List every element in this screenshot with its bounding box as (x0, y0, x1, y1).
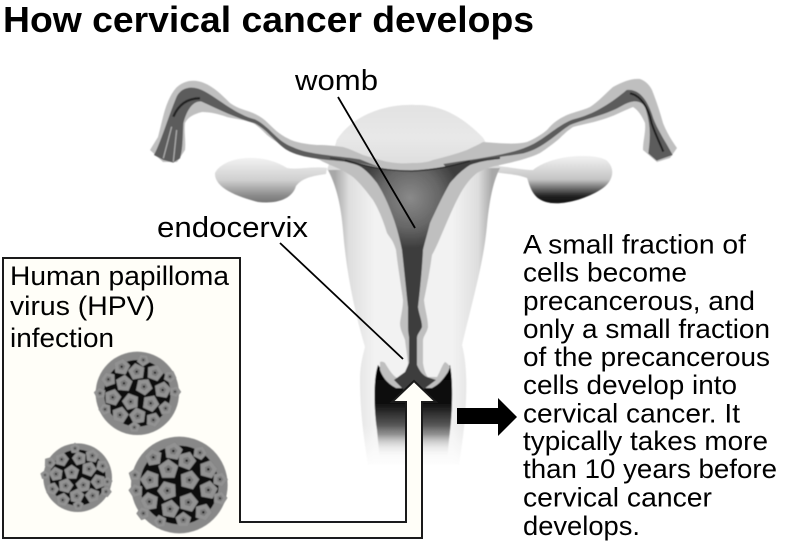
text block: explanation: cervical cancer (523, 482, 712, 512)
uterine wall and fallopian tubes outer band (150, 79, 677, 388)
text block: explanation: only a small fraction (523, 314, 770, 344)
text block: explanation: cells become (523, 258, 687, 288)
title: How cervical cancer develops (3, 0, 534, 40)
cavity roof line (345, 160, 470, 171)
left ovary (215, 158, 327, 202)
text block: explanation: A small fraction of (523, 230, 747, 260)
left tube lumen (154, 88, 380, 167)
diagram: uterus anatomy (150, 79, 677, 470)
arrow: black arrow to explanation (457, 398, 517, 436)
panel heading: HPV infection: Human papilloma (10, 261, 229, 291)
uterus dome (327, 105, 500, 170)
uterine cavity (330, 157, 500, 392)
text block: explanation (523, 230, 777, 541)
panel heading: HPV infection (10, 261, 229, 353)
icon: virus top (93, 351, 182, 435)
panel heading: HPV infection: virus (HPV) (10, 291, 155, 321)
uterus body (328, 105, 500, 465)
panel: HPV infection with arrow into cervix (3, 258, 436, 538)
text block: explanation: typically takes more (523, 426, 768, 456)
icon: virus lower left (41, 443, 113, 512)
lower fade (350, 425, 480, 470)
vaginal canal (374, 365, 452, 462)
right tube lumen (443, 90, 673, 168)
label: womb: womb (294, 65, 378, 97)
text block: explanation: than 10 years before (523, 454, 777, 484)
text block: explanation: develops. (523, 511, 640, 541)
icon: virus lower right (128, 437, 229, 533)
text block: explanation: of the precancerous (523, 342, 770, 372)
text block: explanation: precancerous, and (523, 286, 755, 316)
pointer line: endocervix (280, 243, 403, 359)
pointer line: womb (338, 97, 415, 228)
right ovary (494, 156, 612, 203)
text block: explanation: cervical cancer. It (523, 398, 741, 428)
text block: explanation: cells develop into (523, 370, 737, 400)
label: endocervix: endocervix (157, 212, 308, 244)
panel heading: HPV infection: infection (10, 323, 114, 353)
